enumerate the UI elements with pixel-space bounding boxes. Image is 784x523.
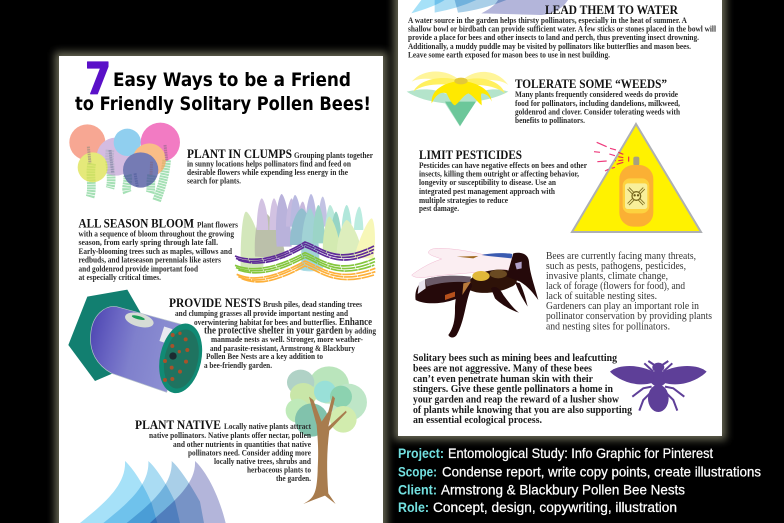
text block: threats to bees: invasive plants, climate change, <box>546 271 668 282</box>
text block: limit pesticides: LIMIT PESTICIDES <box>419 148 522 162</box>
illustration: flower clumps <box>69 123 180 201</box>
text block: provide nests: manmade nests as well. Stronger, more weather- <box>211 335 363 344</box>
text block: lead them to water: LEAD THEM TO WATER <box>545 3 679 17</box>
text block: all season bloom: season, from early spring through late fall. <box>78 238 218 247</box>
text block: provide nests: and clumping grasses all provide important nesting and <box>175 309 348 318</box>
illustration: water drops, upper part <box>411 0 568 15</box>
text block: plant native: herbaceous plants to <box>247 466 311 474</box>
illustration: weed flower <box>407 72 508 127</box>
text block: limit pesticides: longevity or susceptibility to disease. Use an <box>419 178 556 187</box>
caption line: client: Armstrong & Blackbury Pollen Bee Nests <box>441 481 685 497</box>
caption line: scope: Condense report, write copy points, create illustrations <box>442 464 761 480</box>
text block: threats to bees: Gardeners can play an important role in <box>546 301 699 312</box>
caption line: role: Concept, design, copywriting, illustration <box>433 499 677 515</box>
text block: plant native: native pollinators. Native plants offer nectar, pollen <box>149 431 311 440</box>
text block: limit pesticides <box>419 148 587 213</box>
text block: lead them to water: Additionally, a muddy puddle may be visited by pollinators like butterflies and mason bees. <box>408 42 691 51</box>
text block: threats to bees: such as pests, pathogens, pesticides, <box>546 261 686 272</box>
text block: solitary bees: of plants while knowing that you are also supporting <box>413 405 633 416</box>
title <box>75 54 371 115</box>
text block: threats to bees: pollinator conservation by providing plants <box>546 311 712 322</box>
text block: plant native: pollinators need. Consider adding more <box>188 448 311 458</box>
caption line: project: Entomological Study: Info Graphic for Pinterest <box>448 445 713 461</box>
text block: tolerate some weeds: food for pollinators, including dandelions, milkweed, <box>515 99 680 108</box>
text block: all season bloom: ALL SEASON BLOOM <box>78 217 194 231</box>
text block: all season bloom: with a sequence of bloom throughout the growing <box>78 230 235 239</box>
caption line: role: Role: <box>398 499 429 515</box>
text block: lead them to water: shallow bowl or birdbath can provide sufficient water. A few sticks or stones placed in the bowl will <box>408 24 717 34</box>
caption line: client: Client: <box>398 481 437 497</box>
text block: plant in clumps: desirable flowers while expending less energy in the <box>187 168 348 177</box>
text block: solitary bees <box>413 353 633 426</box>
text block: provide nests <box>169 296 377 370</box>
illustration: season bloom petals and waves <box>235 194 375 282</box>
text block: threats to bees: lack of forage (flowers for food), and <box>546 281 686 292</box>
text block: limit pesticides: pest damage. <box>419 204 459 213</box>
text block: plant native: the garden. <box>276 474 311 483</box>
illustration: pesticide warning triangle <box>572 124 701 232</box>
text block: provide nests: Enhance <box>339 317 372 328</box>
text block: tolerate some weeds: Many plants frequently considered weeds do provide <box>515 90 678 99</box>
text block: plant in clumps: search for plants. <box>187 177 241 186</box>
text block: plant native: Locally native plants attract <box>224 422 311 431</box>
text block: provide nests: the protective shelter in your garden <box>204 326 343 336</box>
text block: all season bloom: at especially critical times. <box>78 273 161 282</box>
icon: purple bee <box>610 361 707 412</box>
text block: lead them to water: Leave some earth exposed for mason bees to use in nest building. <box>408 50 610 60</box>
text block: solitary bees: your garden and reap the reward of a lusher show <box>413 394 620 406</box>
text block: tolerate some weeds: benefits to pollinators. <box>515 116 585 125</box>
text block: limit pesticides: Pesticides can have negative effects on bees and other <box>419 161 587 170</box>
illustration: honey bee photo <box>412 248 538 337</box>
panel: left poster page <box>59 54 383 523</box>
text block: provide nests: by adding <box>345 326 377 336</box>
text block: threats to bees: and nesting sites for pollinators. <box>546 322 670 332</box>
text block: limit pesticides: multiple strategies to reduce <box>419 196 508 205</box>
text block: provide nests: a bee-friendly garden. <box>204 361 272 370</box>
text block: plant in clumps: PLANT IN CLUMPS <box>187 147 292 161</box>
text block: solitary bees: Solitary bees such as mining bees and leafcutting <box>413 353 618 364</box>
text block: all season bloom: Plant flowers <box>197 221 239 230</box>
text block: lead them to water <box>408 3 717 60</box>
text block: threats to bees: lack of suitable nesting sites. <box>546 291 657 302</box>
title: to Friendly Solitary Pollen Bees! <box>75 93 371 115</box>
text block: solitary bees: bees are not aggressive. Many of these bees <box>413 364 592 374</box>
title: 7 <box>85 54 111 105</box>
text block: threats to bees: Bees are currently facing many threats, <box>546 251 696 262</box>
text block: limit pesticides: insects, killing them outright or affecting behavior, <box>419 170 579 178</box>
text block: provide nests: PROVIDE NESTS <box>169 296 261 310</box>
text block: plant native: and other nutrients in quantities that native <box>173 440 311 449</box>
text block: tolerate some weeds <box>515 77 680 125</box>
text block: lead them to water: A water source in the garden helps thirsty pollinators, especially in the heat of summer. A <box>408 16 687 25</box>
text block: tolerate some weeds: goldenrod and clover. Consider tolerating weeds with <box>515 108 680 116</box>
caption line: project: Project: <box>398 445 444 461</box>
caption line: scope: Scope: <box>398 464 437 480</box>
text block: all season bloom <box>78 217 239 282</box>
text block: solitary bees: an essential ecological process. <box>413 415 542 426</box>
text block: threats to bees <box>546 251 712 332</box>
text block: all season bloom: and goldenrod provide important food <box>78 264 198 274</box>
text block: provide nests: overwintering habitat for bees and butterflies. <box>194 318 337 327</box>
text block: all season bloom: Early-blooming trees such as maples, willows and <box>78 247 232 256</box>
text block: limit pesticides: integrated pest management approach with <box>419 187 555 196</box>
illustration: pollen bee nest <box>68 290 208 397</box>
text block: solitary bees: can’t even penetrate human skin with their <box>413 374 593 385</box>
illustration: tree <box>286 366 367 504</box>
text block: plant in clumps: in sunny locations helps pollinators find and feed on <box>187 160 351 168</box>
text block: provide nests: Pollen Bee Nests are a key addition to <box>206 352 323 361</box>
text block: lead them to water: provide a place for bees and other insects to land and perch, thus preventing insect drowning. <box>408 33 699 42</box>
illustration: water drops, lower half <box>80 461 226 523</box>
text block: plant in clumps <box>187 147 373 186</box>
text block: all season bloom: redbuds, and lateseason perennials like asters <box>78 256 222 265</box>
project caption <box>398 445 761 515</box>
text block: provide nests: and parasite-resistant, Armstrong & Blackbury <box>210 344 356 353</box>
text block: plant native: locally native trees, shrubs and <box>214 457 311 466</box>
title: Easy Ways to be a Friend <box>113 69 351 91</box>
text block: solitary bees: stingers. Give these gentle pollinators a home in <box>413 384 613 395</box>
text block: provide nests: Brush piles, dead standing trees <box>263 300 363 309</box>
text block: plant native: PLANT NATIVE <box>135 418 221 432</box>
text block: plant native <box>135 418 311 483</box>
text block: plant in clumps: Grouping plants together <box>294 151 373 160</box>
text block: tolerate some weeds: TOLERATE SOME “WEEDS” <box>515 77 667 91</box>
panel: right poster page <box>398 0 722 436</box>
